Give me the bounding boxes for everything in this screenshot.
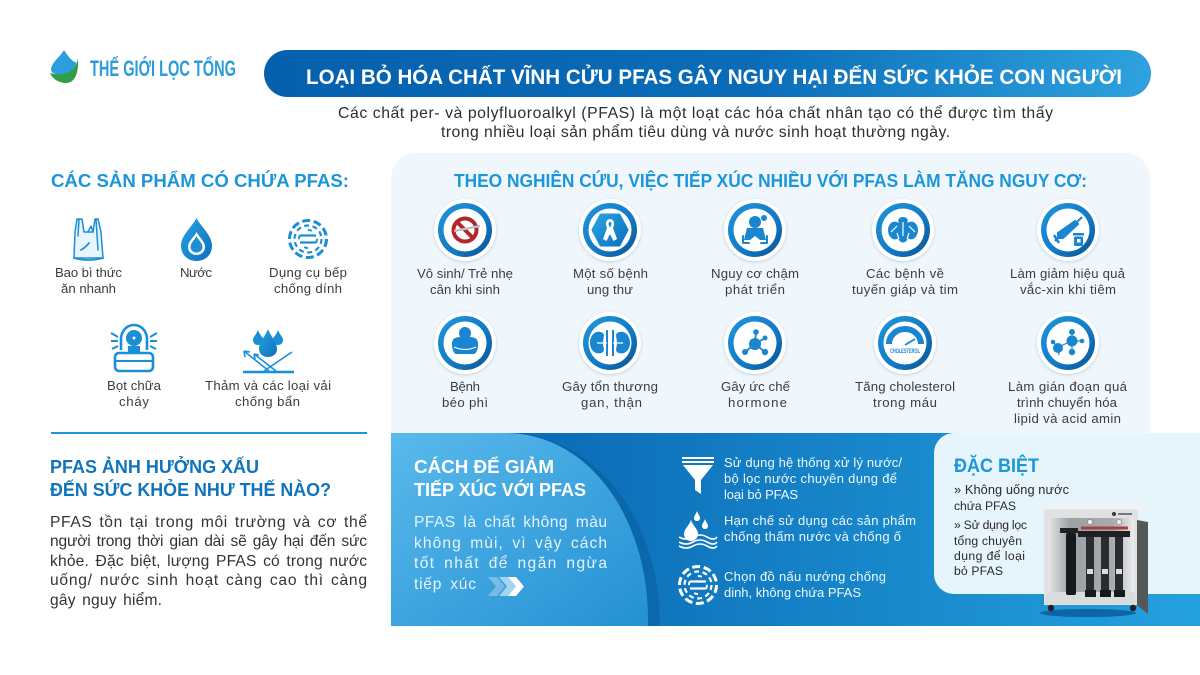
text block: reduce exposure: không mùi, vì vậy cách (414, 535, 607, 552)
risk: metabolism disruption: lipid và acid amin (1014, 411, 1121, 426)
label: fabric (205, 378, 331, 409)
text: limit waterproof products: Hạn chế sử dụng các sản phẩm (724, 513, 916, 528)
risk: hormone (721, 312, 791, 410)
risk: infertility: Vô sinh/ Trẻ nhẹ (417, 266, 513, 281)
risk: developmental delay (711, 199, 799, 297)
text block: health effects: khỏe. Đặc biệt, lượng PFAS có trong nước (50, 553, 367, 570)
risk: obesity: béo phì (442, 395, 488, 410)
intro text (338, 104, 1053, 141)
text block: reduce exposure (414, 514, 607, 593)
risk: hormone: Gây ức chế (721, 379, 791, 394)
risk: thyroid: Các bệnh về (866, 266, 944, 281)
risk: obesity (434, 312, 496, 410)
text: choose cookware (724, 569, 886, 600)
heading: reduce exposure (414, 456, 586, 500)
panel: health risks (391, 153, 1150, 433)
filter cabinet (1040, 504, 1148, 617)
risk: infertility (417, 199, 513, 297)
arrow: chevrons (488, 577, 524, 596)
text: special advice (954, 482, 1070, 578)
heading: reduce exposure: TIẾP XÚC VỚI PFAS (414, 479, 586, 500)
heading: health effects: PFAS ẢNH HƯỞNG XẤU (50, 456, 259, 477)
icon: non-stick pan (290, 220, 326, 258)
text: use filter (724, 455, 902, 502)
icon: stain-proof fabric (243, 329, 294, 372)
label: bag (55, 265, 122, 296)
risk: obesity: Bệnh (450, 379, 480, 394)
text: special advice: dụng để loại (954, 549, 1025, 563)
icon: water drop (181, 218, 212, 261)
heading: health effects: ĐẾN SỨC KHỎE NHƯ THẾ NÀO? (50, 479, 331, 500)
text: special advice: bỏ PFAS (954, 564, 1003, 578)
heading: health effects (50, 456, 331, 500)
text: special advice: tổng chuyên (954, 534, 1022, 548)
text block: reduce exposure: tốt nhất để ngăn ngừa (414, 554, 607, 572)
text: choose cookware: Chọn đồ nấu nướng chống (724, 569, 886, 584)
label: cookware (269, 265, 347, 296)
heading: risks: THEO NGHIÊN CỨU, VIỆC TIẾP XÚC NHIỀU VỚI PFAS LÀM TĂNG NGUY CƠ: (454, 170, 1087, 191)
risk: vaccine: Làm giảm hiệu quả (1010, 266, 1126, 281)
risk: developmental delay: Nguy cơ chậm (711, 266, 799, 281)
label: foam: Bọt chữa (107, 378, 162, 393)
risk: vaccine: vắc-xin khi tiêm (1020, 282, 1116, 297)
text block: health effects: người trong thời gian dài sẽ gây hại đến sức (50, 533, 367, 550)
label: bag: Bao bì thức (55, 265, 122, 280)
panel: how PFAS affects health (50, 456, 367, 609)
text block: health effects: PFAS tồn tại trong môi trường và cơ thể (50, 513, 367, 531)
risk: liver and kidney (562, 312, 658, 410)
risk: thyroid (852, 199, 958, 297)
risk: vaccine (1010, 199, 1126, 297)
icon: fire alarm (111, 325, 157, 371)
title banner (264, 50, 1151, 97)
logo (50, 50, 236, 83)
text: special advice: chứa PFAS (954, 499, 1016, 513)
icon: pan white (680, 566, 716, 604)
risk: cancer (573, 199, 648, 297)
icon: drops and waves (679, 511, 717, 548)
text: use filter: Sử dụng hệ thống xử lý nước/ (724, 455, 902, 470)
risk: hormone: hormone (728, 395, 787, 410)
label: foam: cháy (119, 394, 149, 409)
intro text: trong nhiều loại sản phẩm tiêu dùng và nước sinh hoạt thường ngày. (441, 123, 950, 141)
label: fabric: chống bẩn (235, 394, 300, 409)
risk: metabolism disruption: Làm gián đoạn quá (1008, 379, 1128, 394)
risk: cholesterol: CHOLESTEROL (890, 349, 920, 355)
text: use filter: loại bỏ PFAS (724, 487, 798, 502)
text block: health effects: uống/ nước sinh hoạt càng cao thì càng (50, 572, 367, 589)
risk: cholesterol (855, 312, 955, 410)
title banner: LOẠI BỎ HÓA CHẤT VĨNH CỬU PFAS GÂY NGUY HẠI ĐẾN SỨC KHỎE CON NGƯỜI (306, 65, 1122, 89)
label: bag: ăn nhanh (61, 281, 116, 296)
risk: liver and kidney: Gây tổn thương (562, 379, 658, 394)
text block: reduce exposure: tiếp xúc (414, 576, 476, 593)
panel: special (934, 433, 1200, 617)
heading: special: ĐẶC BIỆT (954, 453, 1039, 477)
heading: products: CÁC SẢN PHẨM CÓ CHỨA PFAS: (51, 170, 349, 191)
risk: cholesterol: trong máu (873, 395, 937, 410)
icon: funnel (682, 457, 714, 494)
text block: reduce exposure: PFAS là chất không màu (414, 514, 607, 531)
text: special advice: » Không uống nước (954, 482, 1070, 497)
panel: how to reduce exposure (391, 433, 1200, 626)
label: fabric: Thảm và các loại vải (205, 378, 331, 393)
label: foam (107, 378, 162, 409)
risk: cancer: ung thư (587, 282, 633, 297)
text block: health effects: gây nguy hiểm. (50, 591, 162, 609)
risk: thyroid: tuyến giáp và tim (852, 282, 958, 297)
heading: reduce exposure: CÁCH ĐỂ GIẢM (414, 456, 554, 477)
text: special advice: » Sử dụng lọc (954, 518, 1027, 532)
logo wordmark: THẾ GIỚI LỌC TỔNG (90, 56, 236, 81)
risk: infertility: cân khi sinh (430, 282, 500, 297)
risk: liver and kidney: gan, thận (581, 395, 642, 410)
text: limit waterproof products: chống thấm nước và chống ố (724, 529, 901, 544)
label: cookware: chống dính (274, 281, 342, 296)
text: use filter: bộ lọc nước chuyên dụng để (724, 471, 897, 486)
label: cookware: Dụng cụ bếp (269, 265, 347, 280)
risk: cancer: Một số bệnh (573, 266, 648, 281)
text: choose cookware: dinh, không chứa PFAS (724, 585, 861, 600)
text: limit waterproof products (724, 513, 916, 544)
label: water: Nước (180, 265, 212, 280)
intro text: Các chất per- và polyfluoroalkyl (PFAS) là một loạt các hóa chất nhân tạo có thể được tìm thấy (338, 104, 1053, 122)
risk: cholesterol: Tăng cholesterol (855, 379, 955, 394)
risk: metabolism disruption (1008, 312, 1128, 426)
logo icon: water drop over green bowl (50, 50, 78, 83)
icon: plastic bag (74, 219, 103, 260)
risk: metabolism disruption: trình chuyển hóa (1017, 395, 1118, 410)
panel: products containing PFAS (51, 170, 349, 409)
risk: developmental delay: phát triển (725, 282, 785, 297)
text block: health effects (50, 513, 367, 609)
